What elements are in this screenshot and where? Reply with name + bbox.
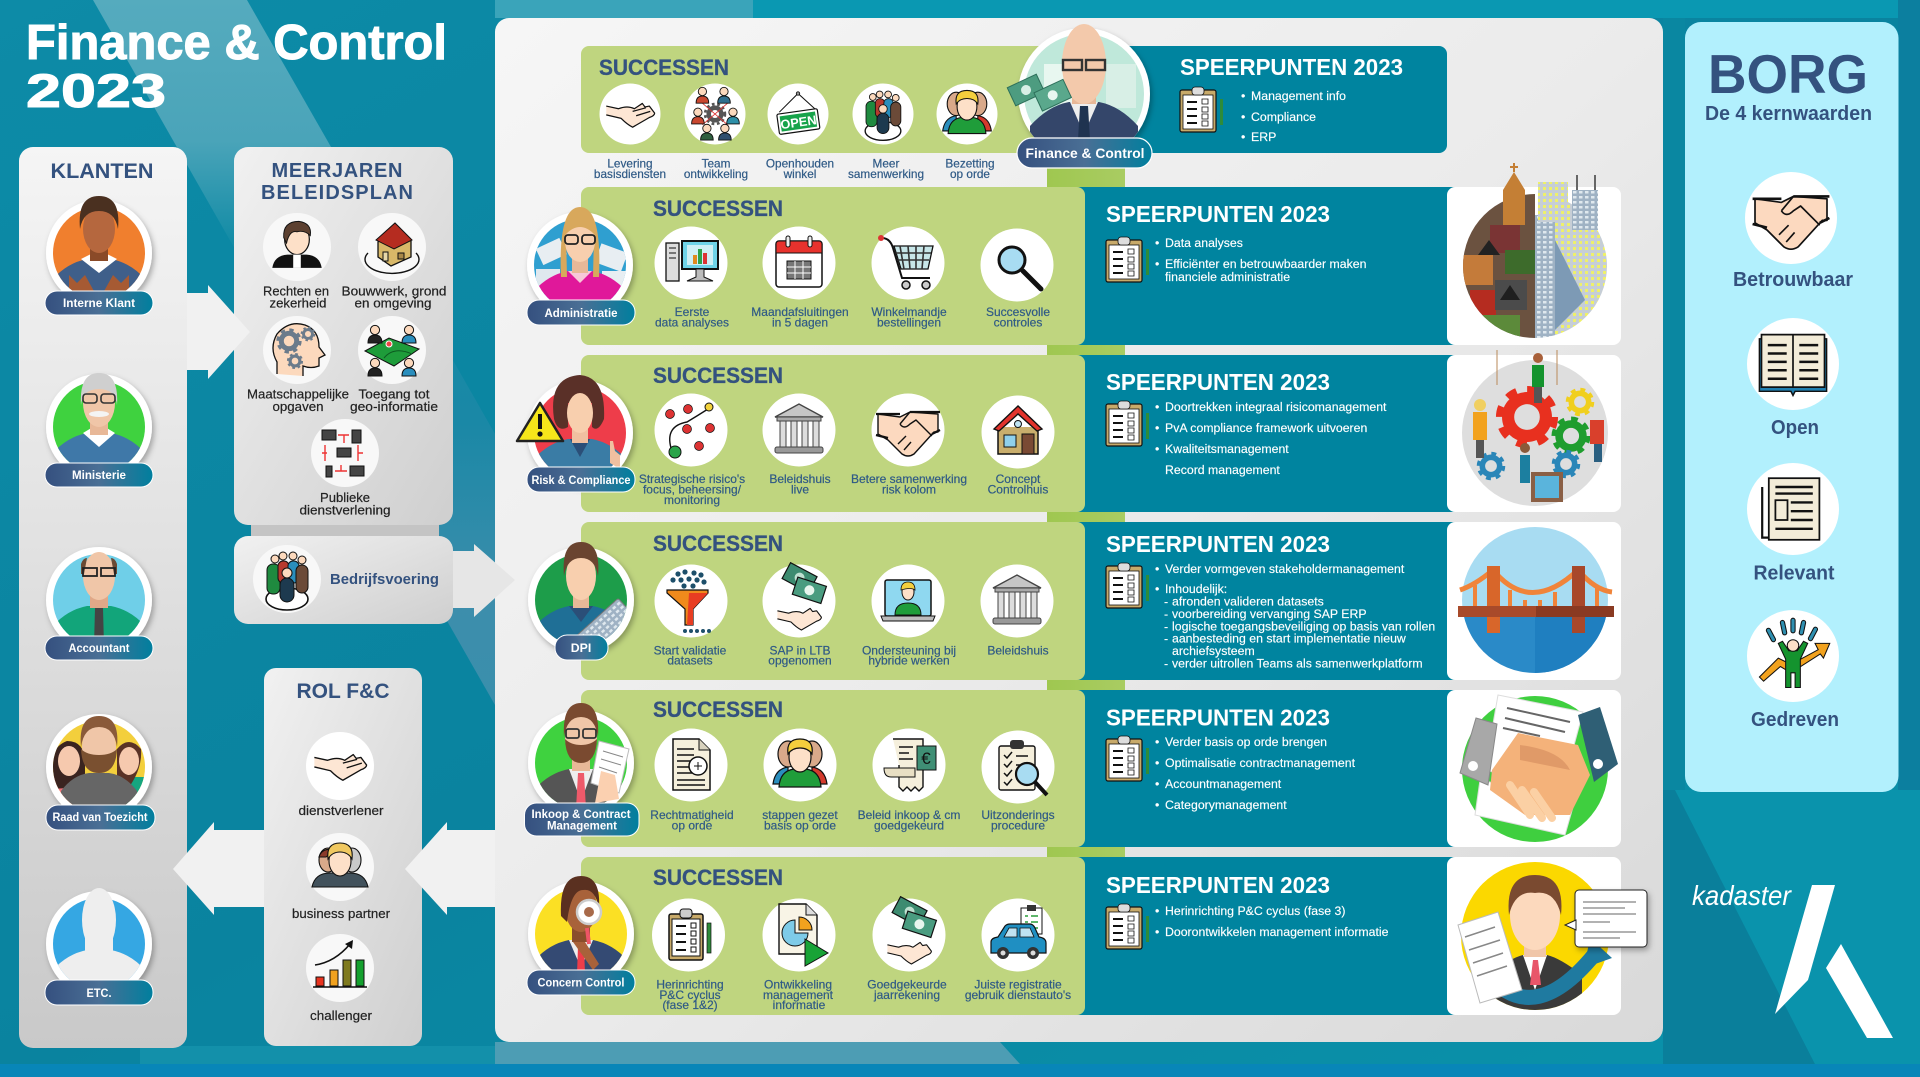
value: gedreven: Gedreven xyxy=(1751,709,1839,731)
persona: interne klant xyxy=(45,196,153,315)
item: rechten en zekerheid xyxy=(263,213,331,310)
speerpunten panel: PvA compliance framework uitvoeren xyxy=(1165,421,1367,435)
heading: meerjaren beleidsplan: BELEIDSPLAN xyxy=(261,182,413,204)
successen panel: Succesvolle xyxy=(986,305,1050,319)
persona: finance & control: Finance & Control xyxy=(1026,145,1144,161)
successen panel: hybride werken xyxy=(868,654,950,668)
persona: etc xyxy=(45,888,153,1005)
picture: tandwielen xyxy=(1447,350,1621,512)
heading: meerjaren beleidsplan xyxy=(261,160,413,204)
persona: concern control xyxy=(527,876,635,995)
speerpunten panel: • xyxy=(1241,110,1245,124)
picture: brug xyxy=(1447,522,1621,680)
value: betrouwbaar xyxy=(1733,172,1853,291)
successen panel: Strategische risico's xyxy=(639,472,745,486)
speerpunten panel: afronden valideren datasets xyxy=(1172,594,1324,608)
label: bedrijfsvoering: Bedrijfsvoering xyxy=(330,572,439,588)
successen panel: Betere samenwerking xyxy=(851,472,967,486)
successen panel: Concept xyxy=(996,472,1040,486)
speerpunten panel: Compliance xyxy=(1251,110,1316,124)
speerpunten panel: logische toegangsbeveiliging op basis van rollen xyxy=(1172,620,1435,634)
row: finance & control xyxy=(581,24,1447,181)
item: bouwwerk, grond en omgeving: en omgeving xyxy=(354,296,432,310)
successen panel xyxy=(581,355,1085,512)
successen panel: Winkelmandje xyxy=(871,305,947,319)
labels: successen finance & control: op orde xyxy=(950,167,990,181)
persona: raad van toezicht xyxy=(46,714,155,830)
successen panel: bestellingen xyxy=(877,315,941,329)
icon: bedrijfsvoering xyxy=(253,545,321,613)
speerpunten panel: Verder basis op orde brengen xyxy=(1165,735,1327,749)
speerpunten panel: SPEERPUNTEN 2023 xyxy=(1180,54,1403,80)
speerpunten panel: Doortrekken integraal risicomanagement xyxy=(1165,400,1387,414)
persona: concern control: Concern Control xyxy=(538,978,624,990)
arrow: klanten naar meerjaren xyxy=(187,285,250,379)
speerpunten panel: Data analyses xyxy=(1165,236,1243,250)
speerpunten panel: financiele administratie xyxy=(1165,270,1290,284)
successen panel: SAP in LTB xyxy=(770,644,830,658)
speerpunten panel: - xyxy=(1164,632,1168,646)
labels: successen finance & control: Levering xyxy=(607,156,653,170)
successen panel: datasets xyxy=(667,654,713,668)
item: toegang tot geo-informatie: Toegang tot xyxy=(358,386,430,402)
value: relevant xyxy=(1747,463,1839,584)
speerpunten panel xyxy=(1070,522,1455,680)
item: bouwwerk, grond en omgeving xyxy=(342,213,446,310)
speerpunten panel xyxy=(1070,187,1455,345)
successen panel: Controlhuis xyxy=(988,482,1048,496)
successen panel: Goedgekeurde xyxy=(867,978,947,992)
successen panel: Eerste xyxy=(675,305,709,319)
speerpunten panel: Herinrichting P&C cyclus (fase 3) xyxy=(1165,904,1345,918)
item: maatschappelijke opgaven: opgaven xyxy=(272,399,324,414)
heading: klanten: KLANTEN xyxy=(50,160,154,183)
successen panel: basis op orde xyxy=(764,818,836,832)
item: maatschappelijke opgaven xyxy=(247,316,349,414)
successen panel: data analyses xyxy=(655,315,729,329)
successen panel xyxy=(581,46,1081,153)
item: business partner xyxy=(292,833,391,921)
labels: successen finance & control: samenwerking xyxy=(848,167,924,181)
successen panel: live xyxy=(791,482,809,496)
speerpunten panel: SPEERPUNTEN 2023 xyxy=(1106,872,1330,898)
speerpunten panel: Efficiënter en betrouwbaarder maken xyxy=(1165,257,1367,271)
speerpunten panel: • xyxy=(1155,400,1159,414)
successen panel: opgenomen xyxy=(768,654,832,668)
labels: successen finance & control xyxy=(594,156,995,181)
successen panel: controles xyxy=(994,315,1042,329)
successen panel: jaarrekening xyxy=(873,988,940,1002)
successen panel: gebruik dienstauto's xyxy=(965,988,1071,1002)
item: dienstverlener: dienstverlener xyxy=(298,803,384,818)
speerpunten panel: - xyxy=(1164,607,1168,621)
item: maatschappelijke opgaven: Maatschappelijke xyxy=(247,386,349,402)
successen panel: SUCCESSEN xyxy=(653,363,783,388)
successen panel: SUCCESSEN xyxy=(653,196,783,221)
successen panel xyxy=(581,690,1085,847)
heading: borg: BORG xyxy=(1708,43,1868,105)
persona: inkoop & contract management: Management xyxy=(547,820,617,832)
persona: administratie: Administratie xyxy=(544,308,618,320)
successen panel: SUCCESSEN xyxy=(653,697,783,722)
speerpunten panel: Accountmanagement xyxy=(1165,777,1282,791)
labels: successen finance & control: Team xyxy=(702,156,730,170)
speerpunten panel: Kwaliteitsmanagement xyxy=(1165,442,1289,456)
successen panel: (fase 1&2) xyxy=(662,998,718,1012)
row: concern control xyxy=(527,857,1647,1015)
item: rechten en zekerheid: zekerheid xyxy=(270,296,326,310)
speerpunten panel: verder uitrollen Teams als samenwerkplatform xyxy=(1172,656,1423,670)
logo: kadaster xyxy=(1692,880,1893,1038)
speerpunten panel: Verder vormgeven stakeholdermanagement xyxy=(1165,562,1405,576)
speerpunten panel: • xyxy=(1155,904,1159,918)
speerpunten panel: Record management xyxy=(1165,463,1280,477)
picture: stad xyxy=(1447,163,1621,345)
successen panel: informatie xyxy=(773,998,826,1012)
successen panel: Beleidshuis xyxy=(769,472,831,486)
successen panel: Juiste registratie xyxy=(974,978,1062,992)
persona: risk & compliance: Risk & Compliance xyxy=(532,475,630,487)
successen panel: in 5 dagen xyxy=(772,315,828,329)
speerpunten panel: • xyxy=(1241,130,1245,144)
speerpunten panel: SPEERPUNTEN 2023 xyxy=(1106,201,1330,227)
value: betrouwbaar: Betrouwbaar xyxy=(1733,269,1853,291)
speerpunten panel: • xyxy=(1155,582,1159,596)
item: bouwwerk, grond en omgeving: Bouwwerk, grond xyxy=(342,284,446,298)
speerpunten panel: • xyxy=(1155,562,1159,576)
labels: successen finance & control: Bezetting xyxy=(945,156,995,170)
item: toegang tot geo-informatie: geo-informatie xyxy=(350,399,438,414)
value: gedreven xyxy=(1747,610,1839,731)
speerpunten panel: • xyxy=(1155,442,1159,456)
speerpunten panel: • xyxy=(1155,236,1159,250)
title: Finance & Control xyxy=(26,16,447,70)
persona: accountant xyxy=(45,547,153,660)
successen panel: procedure xyxy=(991,818,1045,832)
item: publieke dienstverlening: dienstverlening xyxy=(300,502,390,518)
successen panel: P&C cyclus xyxy=(659,988,721,1002)
speerpunten panel: - xyxy=(1164,656,1168,670)
panel: rol f&c xyxy=(264,668,422,1046)
speerpunten panel: • xyxy=(1155,257,1159,271)
labels: successen finance & control: Openhouden xyxy=(766,156,834,170)
item: toegang tot geo-informatie xyxy=(350,316,438,414)
speerpunten panel: Inhoudelijk: xyxy=(1165,582,1227,596)
successen panel: Beleidshuis xyxy=(987,644,1049,658)
connectors: green xyxy=(1047,150,1125,860)
speerpunten panel: - xyxy=(1164,620,1168,634)
successen panel: Ontwikkeling xyxy=(764,978,832,992)
speerpunten panel: archiefsysteem xyxy=(1172,644,1255,658)
speerpunten panel: voorbereiding vervanging SAP ERP xyxy=(1172,607,1367,621)
successen panel: Rechtmatigheid xyxy=(650,808,734,822)
persona: ministerie xyxy=(45,373,153,487)
item: publieke dienstverlening xyxy=(300,419,390,518)
persona: risk & compliance xyxy=(517,375,635,492)
persona: interne klant: Interne Klant xyxy=(63,298,135,310)
speerpunten panel: aanbesteding en start implementatie nieuw xyxy=(1172,632,1406,646)
successen panel: SUCCESSEN xyxy=(653,865,783,890)
successen panel: focus, beheersing/ xyxy=(643,482,742,496)
speerpunten panel xyxy=(1060,46,1447,153)
successen panel: management xyxy=(763,988,834,1002)
labels: successen finance & control: winkel xyxy=(783,167,816,181)
persona: administratie xyxy=(527,207,635,325)
successen panel: Herinrichting xyxy=(656,978,724,992)
panel: meerjaren beleidsplan xyxy=(234,147,453,540)
persona: etc: ETC. xyxy=(86,988,112,1000)
persona: inkoop & contract management xyxy=(524,703,639,836)
persona: inkoop & contract management: Inkoop & Contract xyxy=(532,809,631,821)
heading: rol f&c: ROL F&C xyxy=(296,680,390,703)
labels: successen finance & control: ontwikkeling xyxy=(684,167,748,181)
speerpunten panel xyxy=(1070,690,1455,847)
persona: finance & control xyxy=(1007,24,1152,168)
row: inkoop & contract management xyxy=(524,690,1621,847)
speerpunten panel: SPEERPUNTEN 2023 xyxy=(1106,704,1330,730)
panel: bedrijfsvoering xyxy=(234,536,515,624)
speerpunten panel: • xyxy=(1155,421,1159,435)
speerpunten panel xyxy=(1070,857,1455,1015)
item: challenger xyxy=(306,934,374,1023)
logo: kadaster: kadaster xyxy=(1692,880,1793,911)
successen panel: op orde xyxy=(672,818,713,832)
speerpunten panel: • xyxy=(1155,777,1159,791)
speerpunten panel: - xyxy=(1164,594,1168,608)
persona: dpi xyxy=(528,542,637,667)
title xyxy=(26,16,447,117)
speerpunten panel: Management info xyxy=(1251,89,1346,103)
speerpunten panel: • xyxy=(1155,925,1159,939)
item: challenger: challenger xyxy=(310,1008,373,1023)
successen panel xyxy=(581,857,1085,1015)
successen panel: SUCCESSEN xyxy=(653,531,783,556)
value: relevant: Relevant xyxy=(1754,562,1835,584)
panel: klanten xyxy=(19,147,187,1048)
speerpunten panel: Doorontwikkelen management informatie xyxy=(1165,925,1389,939)
item: publieke dienstverlening: Publieke xyxy=(320,490,370,505)
picture: handdruk xyxy=(1447,690,1621,847)
successen panel: Maandafsluitingen xyxy=(751,305,849,319)
item: rechten en zekerheid: Rechten en xyxy=(263,284,329,298)
persona: dpi: DPI xyxy=(571,643,591,655)
picture: manager xyxy=(1447,857,1647,1015)
speerpunten panel: ERP xyxy=(1251,130,1276,144)
speerpunten panel: • xyxy=(1155,735,1159,749)
speerpunten panel: Categorymanagement xyxy=(1165,798,1287,812)
value: open: Open xyxy=(1771,417,1819,439)
speerpunten panel: • xyxy=(1241,89,1245,103)
successen panel: SUCCESSEN xyxy=(599,55,729,80)
speerpunten panel: SPEERPUNTEN 2023 xyxy=(1106,369,1330,395)
speerpunten panel xyxy=(1070,355,1455,512)
arrow: hoofdpaneel naar rol xyxy=(405,822,495,915)
row: dpi xyxy=(528,522,1621,680)
successen panel: Uitzonderings xyxy=(981,808,1055,822)
successen panel: risk kolom xyxy=(882,482,936,496)
speerpunten panel: • xyxy=(1155,798,1159,812)
title: 2023 xyxy=(26,64,166,117)
subheading: de 4 kernwaarden: De 4 kernwaarden xyxy=(1705,103,1872,125)
successen panel: Ondersteuning bij xyxy=(862,644,956,658)
successen panel: goedgekeurd xyxy=(874,818,944,832)
heading: meerjaren beleidsplan: MEERJAREN xyxy=(272,160,402,182)
arrow: rol naar klanten xyxy=(173,822,264,915)
main panel xyxy=(495,18,1663,1042)
successen panel: stappen gezet xyxy=(762,808,838,822)
value: open xyxy=(1747,318,1839,439)
successen panel xyxy=(581,187,1085,345)
successen panel: monitoring xyxy=(664,493,720,507)
labels: successen finance & control: Meer xyxy=(873,156,899,170)
speerpunten panel: SPEERPUNTEN 2023 xyxy=(1106,531,1330,557)
persona: raad van toezicht: Raad van Toezicht xyxy=(52,812,148,824)
persona: accountant: Accountant xyxy=(68,643,130,655)
row: risk & compliance xyxy=(517,350,1621,512)
item: business partner: business partner xyxy=(292,906,391,921)
speerpunten panel: Optimalisatie contractmanagement xyxy=(1165,756,1356,770)
successen panel: Beleid inkoop & cm xyxy=(858,808,960,822)
persona: ministerie: Ministerie xyxy=(72,470,126,482)
item: dienstverlener xyxy=(298,732,384,818)
successen panel: Start validatie xyxy=(654,644,726,658)
successen panel xyxy=(581,522,1085,680)
row: administratie xyxy=(527,163,1621,345)
labels: successen finance & control: basisdiensten xyxy=(594,167,666,181)
panel: borg xyxy=(1685,22,1898,792)
speerpunten panel: • xyxy=(1155,756,1159,770)
